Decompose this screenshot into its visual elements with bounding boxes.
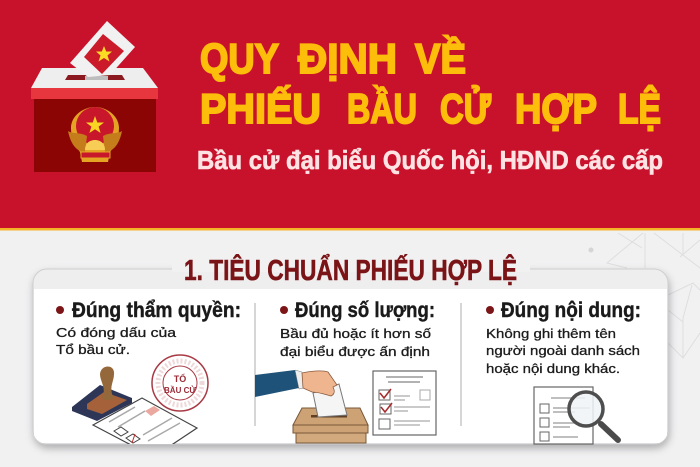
column heading: Đúng thẩm quyền: (72, 299, 241, 322)
title (200, 35, 661, 132)
icon: checklist (373, 371, 436, 435)
header band (0, 0, 700, 230)
icon: rubber stamp (72, 366, 132, 421)
description (486, 326, 640, 376)
bullet (280, 306, 288, 314)
decorative lines (588, 233, 700, 358)
title: BẦU (347, 85, 417, 132)
icon: ballot paper (70, 21, 135, 77)
description: Tổ bầu cử. (56, 342, 130, 357)
box lid (31, 68, 158, 88)
title: HỢP (515, 85, 597, 132)
icon: ballot document (93, 398, 197, 446)
description (56, 325, 177, 357)
card background (33, 269, 668, 444)
icon: national emblem (68, 107, 122, 162)
description: Có đóng dấu của (56, 325, 177, 340)
icon: cardboard ballot box (293, 408, 368, 443)
icon: document and magnifier (534, 387, 618, 444)
description: Bầu đủ hoặc ít hơn số (280, 326, 431, 341)
icon: stamp seal: BẦU CỬ (164, 385, 196, 395)
bullet (56, 306, 64, 314)
box body (34, 99, 156, 172)
title: PHIẾU (200, 85, 321, 132)
title: VỀ (415, 35, 466, 82)
description (280, 326, 431, 359)
column dividers (255, 303, 461, 426)
icon: stamp seal (152, 355, 208, 411)
title: CỬ (440, 84, 491, 132)
panel: valid ballot standards (33, 253, 668, 446)
icon: stamp seal: TỔ (174, 373, 186, 384)
column: correct authority (56, 299, 241, 446)
heading: 1. TIÊU CHUẨN PHIẾU HỢP LỆ (184, 253, 517, 287)
column heading: Đúng số lượng: (295, 299, 435, 322)
bullet (486, 306, 494, 314)
description: đại biểu được ấn định (280, 344, 430, 359)
column: correct quantity (255, 299, 436, 443)
title: LỆ (618, 84, 661, 132)
description: Không ghi thêm tên (486, 326, 616, 341)
column heading: Đúng nội dung: (501, 299, 641, 322)
description: người ngoài danh sách (486, 343, 640, 358)
description: hoặc nội dung khác. (486, 361, 620, 376)
icon: ballot box (31, 21, 158, 172)
icon: hand casting ballot (255, 370, 347, 417)
column: correct content (486, 299, 641, 444)
title: QUY (200, 35, 279, 82)
title: ĐỊNH (298, 35, 397, 82)
subtitle: Bầu cử đại biểu Quốc hội, HĐND các cấp (197, 145, 663, 175)
